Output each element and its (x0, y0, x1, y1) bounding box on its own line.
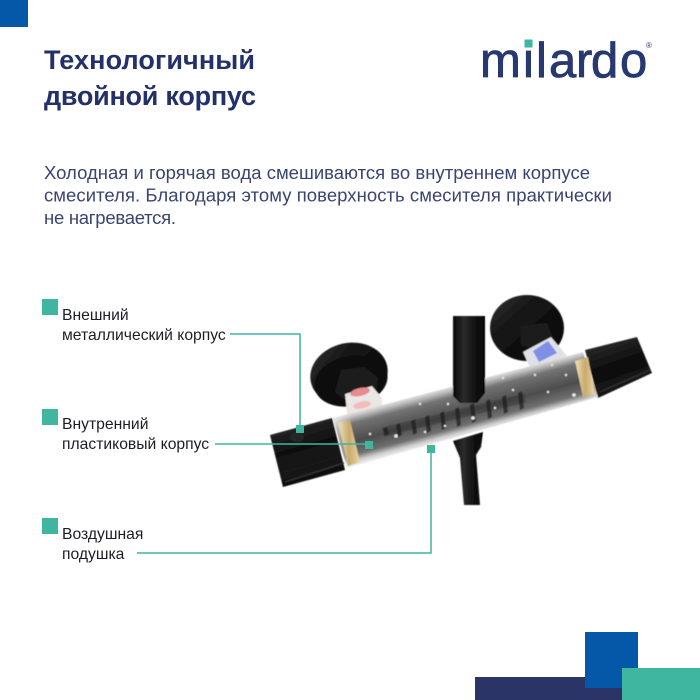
mixer illustration (270, 295, 652, 505)
label: inner body: пластиковый корпус (62, 436, 209, 452)
brass ring right (575, 357, 595, 397)
label: outer body: Внешний (62, 307, 129, 324)
leader line: inner body (215, 443, 369, 445)
marker: air cushion (427, 445, 435, 453)
icon: hose (453, 432, 483, 505)
detail: small screw (290, 432, 304, 442)
bullet 1 (42, 299, 58, 315)
label: air cushion: подушка (62, 546, 124, 562)
description text: Холодная и горячая вода смешиваются во внутреннем корпусе (44, 162, 590, 183)
corner block: teal (622, 668, 700, 700)
leader line: outer body (230, 334, 300, 428)
knob: left hot (304, 336, 394, 421)
bullet 3 (42, 518, 58, 534)
brass ring left (338, 420, 360, 466)
marker: inner body (365, 441, 373, 449)
corner block: navy (475, 677, 622, 700)
corner block: blue (585, 632, 638, 688)
corner square top-left (0, 0, 28, 27)
label: outer body (62, 307, 226, 344)
label: outer body: металлический корпус (62, 326, 226, 344)
marker: outer body (296, 425, 304, 433)
inner ribs (383, 391, 524, 437)
logo: milardo: ® (646, 41, 652, 50)
detail: cap groove right (600, 370, 650, 392)
detail: cap groove left (285, 463, 344, 482)
left end cap (270, 418, 345, 487)
shower pipe (453, 316, 485, 403)
label: air cushion (62, 526, 143, 562)
leader line: air cushion (137, 449, 431, 553)
water bubbles (369, 364, 576, 438)
inner spine (383, 398, 525, 432)
knob: right cold (490, 295, 567, 368)
bullet 2 (42, 409, 58, 425)
right end cap (585, 337, 652, 398)
label: air cushion: Воздушная (62, 526, 143, 543)
transparent tube (333, 352, 598, 468)
description text: смесителя. Благодаря этому поверхность смесителя практически (44, 184, 612, 206)
label: inner body (62, 416, 209, 452)
tube clear ends (333, 352, 598, 468)
title (44, 45, 256, 111)
label: inner body: Внутренний (62, 416, 148, 433)
title: Технологичный (44, 45, 255, 75)
title: двойной корпус (44, 81, 256, 111)
description text (44, 162, 612, 228)
description text: не нагревается. (44, 207, 176, 228)
